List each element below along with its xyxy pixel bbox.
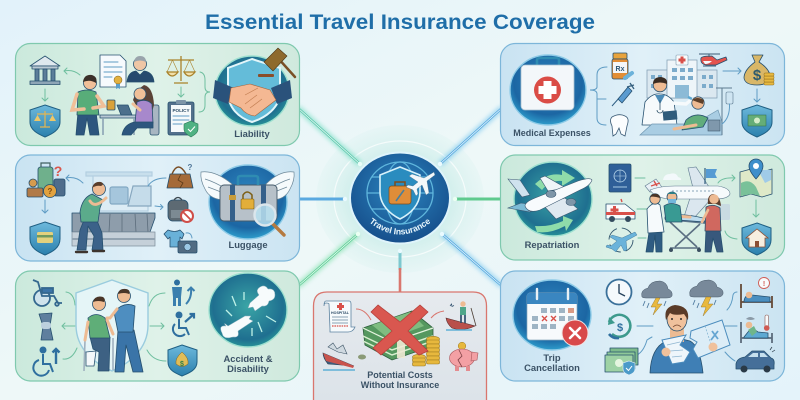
icon: backpack [168, 198, 193, 222]
icon: liability circle [213, 48, 295, 126]
person: patient on crutches [84, 297, 113, 371]
icon: clock [606, 280, 632, 304]
icon: stranded person in boat [446, 301, 476, 330]
hub: travel insurance [349, 152, 451, 244]
label: repatriation: Repatriation [525, 239, 580, 250]
person: lawyer [127, 56, 154, 82]
arrow: to bags [66, 175, 83, 183]
arrow: down to shield [42, 89, 48, 101]
arrow: right [150, 323, 164, 329]
icon: broken piggy bank [450, 342, 478, 371]
icon: accessibility up [33, 348, 60, 376]
baggage carousel [72, 213, 155, 246]
label: trip cancellation: Trip [543, 352, 561, 363]
icon: courthouse [30, 56, 60, 84]
label: liability: Liability [234, 128, 270, 139]
stretcher [665, 215, 706, 252]
connector: medical [438, 108, 502, 166]
person: upset traveller [650, 305, 703, 373]
panel: potential costs without insurance [314, 292, 486, 400]
hub suitcase [389, 182, 411, 204]
carousel windows [86, 172, 152, 211]
icon: wheelchair [33, 280, 62, 306]
icon: tooth [610, 115, 628, 136]
icon: card shield [30, 222, 60, 255]
icon: damaged ship [323, 343, 355, 370]
label: potential costs: Potential Costs [367, 370, 433, 380]
arrow: bags to shield [42, 200, 48, 213]
icon: policy clipboard [168, 100, 198, 137]
icon: cash pile [358, 311, 433, 360]
icon: storm cloud left [642, 281, 672, 315]
icon: calendar circle [513, 280, 591, 350]
hospital bed and patient [640, 97, 722, 135]
icon: red cross out [371, 305, 428, 355]
person: man in green [72, 75, 115, 135]
arrow: to map [718, 175, 735, 183]
arrow: map to shield [753, 200, 759, 217]
icon: prescription bottle: Rx [616, 66, 625, 73]
curve connectors right [147, 293, 166, 361]
brace connector [590, 67, 607, 125]
icon: plane circle [508, 162, 592, 236]
arrow: scales to policy [178, 87, 184, 97]
shield [228, 59, 280, 122]
icon: prescription bottle [612, 53, 632, 79]
person: woman in purple [122, 85, 159, 135]
wings [201, 172, 294, 200]
connectors [635, 178, 648, 238]
icon: fever in bed [741, 315, 772, 343]
icon: syringe [612, 83, 634, 106]
suitcase [220, 185, 277, 221]
person: nurse [664, 192, 682, 222]
icon: money bag [744, 55, 774, 85]
arrow: left [62, 323, 75, 329]
icon: refund arrow [608, 315, 630, 338]
faded luggage [718, 204, 730, 220]
handshake [213, 80, 292, 116]
icon: home shield [742, 223, 771, 255]
curve to carousel [148, 178, 166, 186]
icon: map with pin [740, 159, 772, 197]
title: Essential Travel Insurance Coverage [205, 11, 595, 34]
icon: lost bags [27, 163, 65, 198]
icon: wheelchair progress [173, 312, 194, 336]
hub halo rings [316, 125, 484, 273]
icon: luggage circle [201, 165, 294, 239]
icon: flag [705, 168, 717, 184]
panel: medical expenses [500, 44, 784, 146]
hub globe [367, 162, 433, 224]
icon: t-shirt and camera [164, 230, 197, 253]
icon: person recovering [172, 280, 194, 306]
person: distressed traveller [76, 182, 106, 252]
icon: return flight [606, 228, 637, 252]
icon: certificate document [100, 55, 126, 89]
hands [662, 342, 718, 356]
arrow: to courthouse [64, 68, 80, 75]
connector: repatriation [453, 197, 502, 201]
label: accident and disability: Accident & [224, 353, 273, 364]
panel: liability [16, 44, 300, 146]
icon: hospital bill: HOSPITAL [331, 311, 350, 315]
panel: trip cancellation [500, 271, 784, 381]
person: relative [702, 194, 723, 252]
connector: trip cancellation [440, 232, 502, 286]
icon: broken bone circle [209, 273, 287, 347]
connector: luggage [298, 197, 347, 201]
arrow: hospital to money [723, 68, 741, 74]
person: caregiver [107, 289, 143, 372]
icon: torn ticket [662, 320, 730, 364]
icon: coin stacks [412, 336, 440, 366]
cloud [663, 173, 681, 180]
icon: ambulance [606, 199, 635, 222]
icon: money shield [168, 345, 197, 376]
icon: damaged handbag [167, 163, 193, 188]
icon: sick in bed [741, 278, 772, 308]
hub shield [380, 167, 420, 219]
panel: repatriation [500, 155, 784, 260]
jet [508, 176, 592, 219]
connector: liability [298, 108, 362, 166]
padlock [243, 192, 252, 199]
brace connector [199, 72, 210, 112]
icon: damaged car [736, 347, 775, 372]
icon: lost bags: ? [48, 187, 53, 196]
icon: hospital bill [324, 301, 355, 332]
curve left [356, 309, 371, 320]
icon: refund arrow: $ [617, 322, 623, 334]
icon: helicopter [699, 54, 727, 66]
icon: money bag: $ [753, 67, 762, 84]
icon: money shield: $ [180, 361, 184, 368]
icon: lost bags: ? [54, 163, 62, 179]
curve connectors left [63, 292, 77, 359]
hub plane [406, 172, 435, 196]
iv drip and monitor [708, 88, 733, 135]
curve to shield [725, 231, 737, 239]
panel: luggage [16, 155, 300, 261]
magnifier [272, 223, 284, 235]
person: doctor [642, 77, 692, 125]
hub arc label: Travel Insurance [370, 218, 430, 235]
icon: banknotes with shield [605, 348, 638, 375]
desk with laptop [100, 105, 137, 135]
big shield [76, 280, 148, 371]
icon: passport [609, 164, 631, 192]
panel: accident and disability: Disability [227, 363, 270, 374]
icon: hospital [647, 55, 717, 98]
person: doctor [646, 194, 664, 252]
panel: accident and disability [16, 271, 300, 381]
icon: sick in bed: ! [763, 281, 765, 288]
icon: damaged handbag: ? [188, 163, 193, 172]
connector: costs [398, 249, 402, 292]
connector curves [725, 292, 737, 361]
icon: cash shield [742, 105, 772, 137]
icon: first aid circle [510, 55, 586, 125]
panel: trip cancellation: Cancellation [524, 362, 580, 373]
panel: potential costs without insurance: Without Insurance [361, 380, 439, 390]
icon: balance scales [167, 56, 195, 83]
connector lines [634, 326, 653, 356]
icon: storm cloud right [690, 280, 723, 316]
label: medical expenses: Medical Expenses [513, 128, 591, 138]
curve right [431, 311, 444, 318]
gavel [258, 48, 295, 77]
icon: scales shield [30, 105, 60, 137]
arrow: to backpack [155, 204, 163, 210]
airplane [645, 167, 730, 220]
arrow: money to shield [754, 89, 760, 102]
icon: policy clipboard: POLICY [172, 108, 190, 113]
icon: knee brace [39, 313, 53, 340]
connector: accident [298, 232, 360, 286]
label: luggage: Luggage [228, 239, 268, 250]
